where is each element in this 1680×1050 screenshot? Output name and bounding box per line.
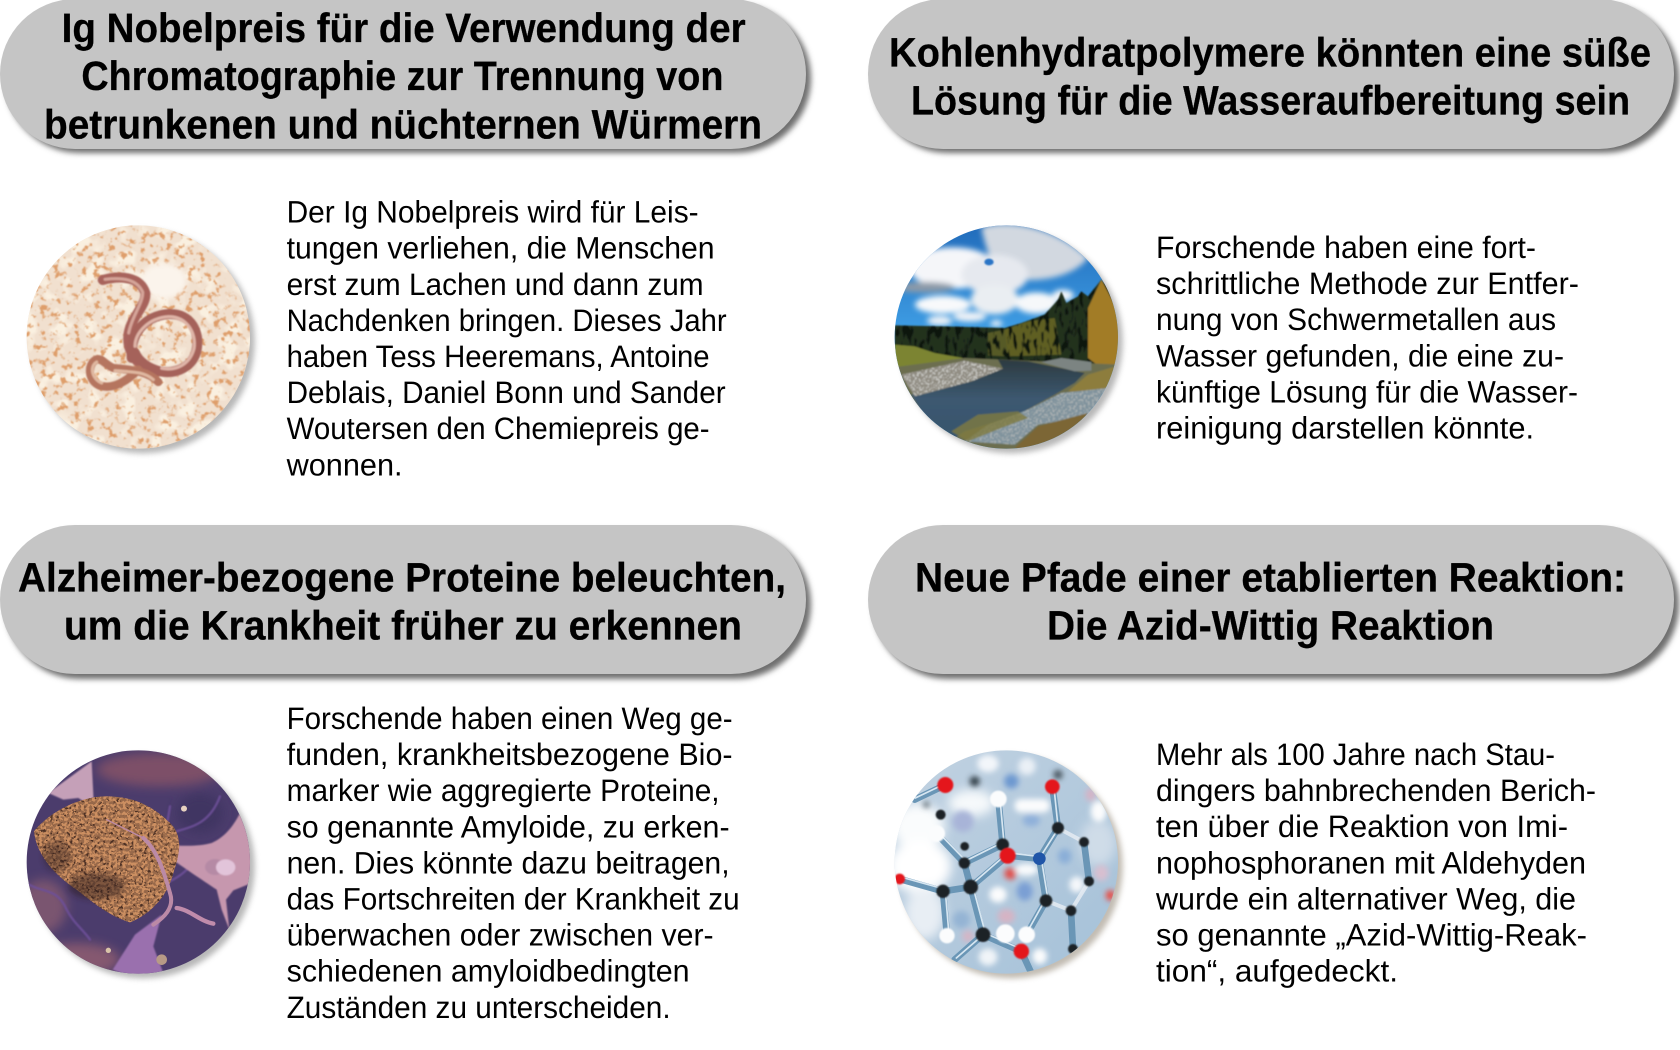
heading pill: Ig Nobelpreis: Ig Nobelpreis für die Verwendung der — [62, 5, 746, 51]
body text: Alzheimer: funden, krankheitsbezogene Bio- — [287, 737, 733, 772]
heading pill: Ig Nobelpreis: Chromatographie zur Trennung von — [81, 53, 723, 99]
body text: Ig Nobelpreis: Der Ig Nobelpreis wird für Leis- — [287, 195, 699, 230]
body text: Wasseraufbereitung: künftige Lösung für die Wasser- — [1156, 374, 1578, 409]
image: river landscape — [888, 218, 1128, 458]
heading pill: Ig Nobelpreis: betrunkenen und nüchternen Würmern — [44, 101, 762, 147]
heading pill: Ig Nobelpreis — [0, 0, 811, 153]
heading pill: Alzheimer — [0, 525, 811, 679]
body text: Alzheimer: Forschende haben einen Weg ge- — [287, 701, 733, 736]
image: amyloid plaque — [20, 743, 260, 983]
body text: Ig Nobelpreis: tungen verliehen, die Menschen — [287, 231, 715, 266]
body text: Azid-Wittig: nophosphoranen mit Aldehyden — [1156, 845, 1586, 880]
body text: Wasseraufbereitung: Forschende haben eine fort- — [1156, 230, 1536, 265]
heading pill: Azid-Wittig: Die Azid-Wittig Reaktion — [1047, 602, 1494, 648]
body text: Azid-Wittig: ten über die Reaktion von Imi- — [1156, 809, 1568, 844]
heading pill: Alzheimer: um die Krankheit früher zu erkennen — [64, 602, 742, 648]
forest — [895, 280, 1121, 368]
body text: Ig Nobelpreis: Nachdenken bringen. Dieses Jahr — [287, 303, 727, 338]
body text: Wasseraufbereitung: nung von Schwermetallen aus — [1156, 302, 1556, 337]
body text: Wasseraufbereitung: reinigung darstellen könnte. — [1156, 410, 1534, 446]
processes over plaque — [107, 820, 213, 925]
image: worm on agar — [20, 218, 260, 458]
body text: Azid-Wittig: Mehr als 100 Jahre nach Stau- — [1156, 737, 1555, 772]
lower neuron — [113, 915, 163, 976]
body text: Ig Nobelpreis: erst zum Lachen und dann zum — [287, 267, 704, 302]
body text: Ig Nobelpreis: haben Tess Heeremans, Antoine — [287, 339, 710, 374]
body text: Azid-Wittig: dingers bahnbrechenden Berich- — [1156, 773, 1596, 808]
body text: Azid-Wittig: tion“, aufgedeckt. — [1156, 954, 1398, 989]
body text: Alzheimer: überwachen oder zwischen ver- — [287, 918, 714, 953]
neuron right — [140, 813, 252, 930]
body text: Alzheimer: so genannte Amyloide, zu erken- — [287, 809, 730, 844]
heading pill: Kohlenhydratpolymere: Lösung für die Wasseraufbereitung sein — [911, 78, 1630, 124]
body text: Azid-Wittig: wurde ein alternativer Weg, die — [1155, 881, 1576, 916]
panel: Ig Nobelpreis — [0, 0, 811, 482]
panel: Kohlenhydratpolymere — [868, 0, 1679, 458]
body text: Alzheimer: Zuständen zu unterscheiden. — [287, 990, 671, 1025]
neuron left — [48, 761, 94, 808]
image: molecule model — [888, 743, 1128, 983]
heading pill: Alzheimer: Alzheimer-bezogene Proteine beleuchten, — [18, 554, 786, 600]
body text: Alzheimer: marker wie aggregierte Proteine, — [287, 773, 720, 808]
bonds — [900, 785, 1089, 973]
panel: Azid-Wittig — [868, 525, 1679, 989]
body text: Azid-Wittig: so genannte „Azid-Wittig-Reak- — [1156, 918, 1587, 952]
river and banks — [898, 356, 1114, 449]
body text: Alzheimer: nen. Dies könnte dazu beitragen, — [287, 845, 730, 880]
body text: Alzheimer: schiedenen amyloidbedingten — [287, 954, 690, 989]
plaque — [34, 796, 179, 922]
body text: Wasseraufbereitung — [1156, 230, 1579, 446]
body text: Ig Nobelpreis: Woutersen den Chemiepreis ge- — [287, 411, 710, 446]
body text: Ig Nobelpreis: wonnen. — [286, 447, 403, 482]
heading pill: Kohlenhydratpolymere — [868, 0, 1679, 153]
body text: Ig Nobelpreis — [286, 195, 727, 482]
heading pill: Azid-Wittig: Neue Pfade einer etablierten Reaktion: — [915, 554, 1626, 600]
body text: Wasseraufbereitung: schrittliche Methode zur Entfer- — [1156, 266, 1579, 301]
panel: Alzheimer — [0, 525, 811, 1025]
body text: Azid-Wittig — [1155, 737, 1596, 989]
body text: Wasseraufbereitung: Wasser gefunden, die eine zu- — [1156, 338, 1564, 373]
body text: Alzheimer: das Fortschreiten der Krankheit zu — [287, 882, 740, 916]
body text: Alzheimer — [287, 701, 740, 1025]
body text: Ig Nobelpreis: Deblais, Daniel Bonn und Sander — [287, 375, 726, 410]
atoms — [936, 810, 1094, 954]
heading pill: Azid-Wittig — [868, 525, 1679, 679]
